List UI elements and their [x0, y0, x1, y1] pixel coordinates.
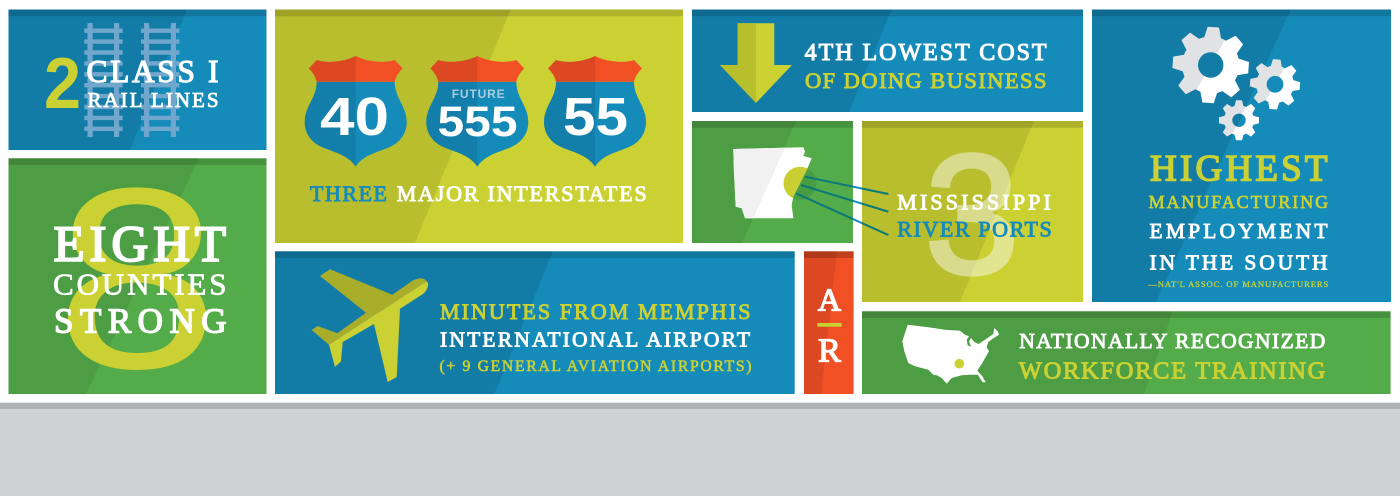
number 8: 8	[55, 134, 219, 423]
icon: Arkansas outline with highlighted region	[733, 147, 816, 218]
icon: interstate 40 shield: 40	[320, 87, 389, 147]
icon: small gear	[1219, 100, 1259, 140]
panel: AR state tag	[804, 251, 854, 394]
text: general aviation airports: (+ 9 GENERAL AVIATION AIRPORTS)	[440, 358, 752, 375]
text: in the south: IN THE SOUTH	[1150, 251, 1328, 275]
icon: future 555 shield: FUTURE	[452, 87, 505, 101]
text: manufacturing: MANUFACTURING	[1149, 192, 1328, 212]
text: Mississippi: MISSISSIPPI	[897, 189, 1051, 214]
text: rail lines: RAIL LINES	[88, 88, 218, 112]
icon: rail tracks	[84, 23, 179, 137]
heading: class I: CLASS I	[86, 54, 218, 89]
text: strong: STRONG	[54, 302, 226, 340]
panel: Mississippi river ports	[862, 120, 1083, 310]
text: international airport: INTERNATIONAL AIRPORT	[440, 328, 750, 352]
panel: class I rail lines	[8, 10, 266, 150]
heading: eight: EIGHT	[54, 217, 226, 273]
panel: Memphis airport	[275, 251, 795, 394]
heading: highest: HIGHEST	[1150, 148, 1328, 189]
text: A: A	[818, 282, 841, 318]
panel: highest manufacturing employment	[1092, 10, 1391, 302]
icon: medium gear	[1248, 58, 1302, 111]
text: R: R	[818, 333, 841, 370]
text: source attribution: —NAT'L ASSOC. OF MANUFACTURERS	[1147, 279, 1329, 289]
arrow: port connector lines	[796, 177, 888, 235]
icon: large gear	[1170, 24, 1251, 106]
icon: interstate 55 shield	[544, 56, 646, 167]
icon: USA map with dot	[902, 325, 999, 384]
number 3: 3	[925, 120, 1019, 310]
panel: three major interstates	[275, 10, 683, 243]
icon: future 555 shield	[426, 56, 528, 167]
text: employment: EMPLOYMENT	[1150, 219, 1328, 243]
text: of doing business: OF DOING BUSINESS	[805, 68, 1046, 93]
text: nationally recognized: NATIONALLY RECOGNIZED	[1019, 329, 1325, 353]
text: workforce training: WORKFORCE TRAINING	[1019, 358, 1325, 385]
text: river ports: RIVER PORTS	[897, 216, 1052, 241]
heading: three major interstates: THREE	[310, 181, 387, 206]
panel: lowest cost	[692, 10, 1083, 112]
panel: eight counties strong	[8, 134, 266, 423]
icon: interstate 40 shield	[305, 56, 407, 167]
heading: three major interstates: MAJOR INTERSTATES	[397, 181, 647, 206]
divider bar	[817, 323, 842, 327]
text: 4th lowest cost: 4TH LOWEST COST	[805, 40, 1047, 66]
text: counties: COUNTIES	[53, 266, 226, 302]
text: minutes from Memphis: MINUTES FROM MEMPHIS	[440, 299, 750, 324]
icon: future 555 shield: 555	[437, 98, 517, 146]
icon: interstate 55 shield: 55	[563, 87, 628, 147]
number 2: 2	[44, 44, 81, 124]
icon: airplane	[312, 269, 428, 382]
panel: Arkansas map	[692, 121, 853, 243]
icon: down arrow	[720, 23, 792, 103]
panel: workforce training	[862, 311, 1391, 394]
